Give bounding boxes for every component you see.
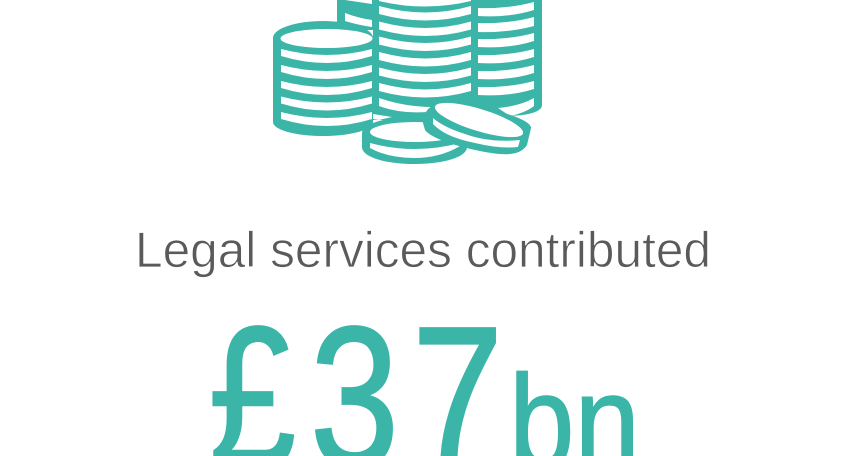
- big number: £37bn: [209, 284, 640, 456]
- heading: legal services contributed: Legal services contributed: [135, 222, 711, 278]
- icon: stacks of coins: [273, 0, 542, 164]
